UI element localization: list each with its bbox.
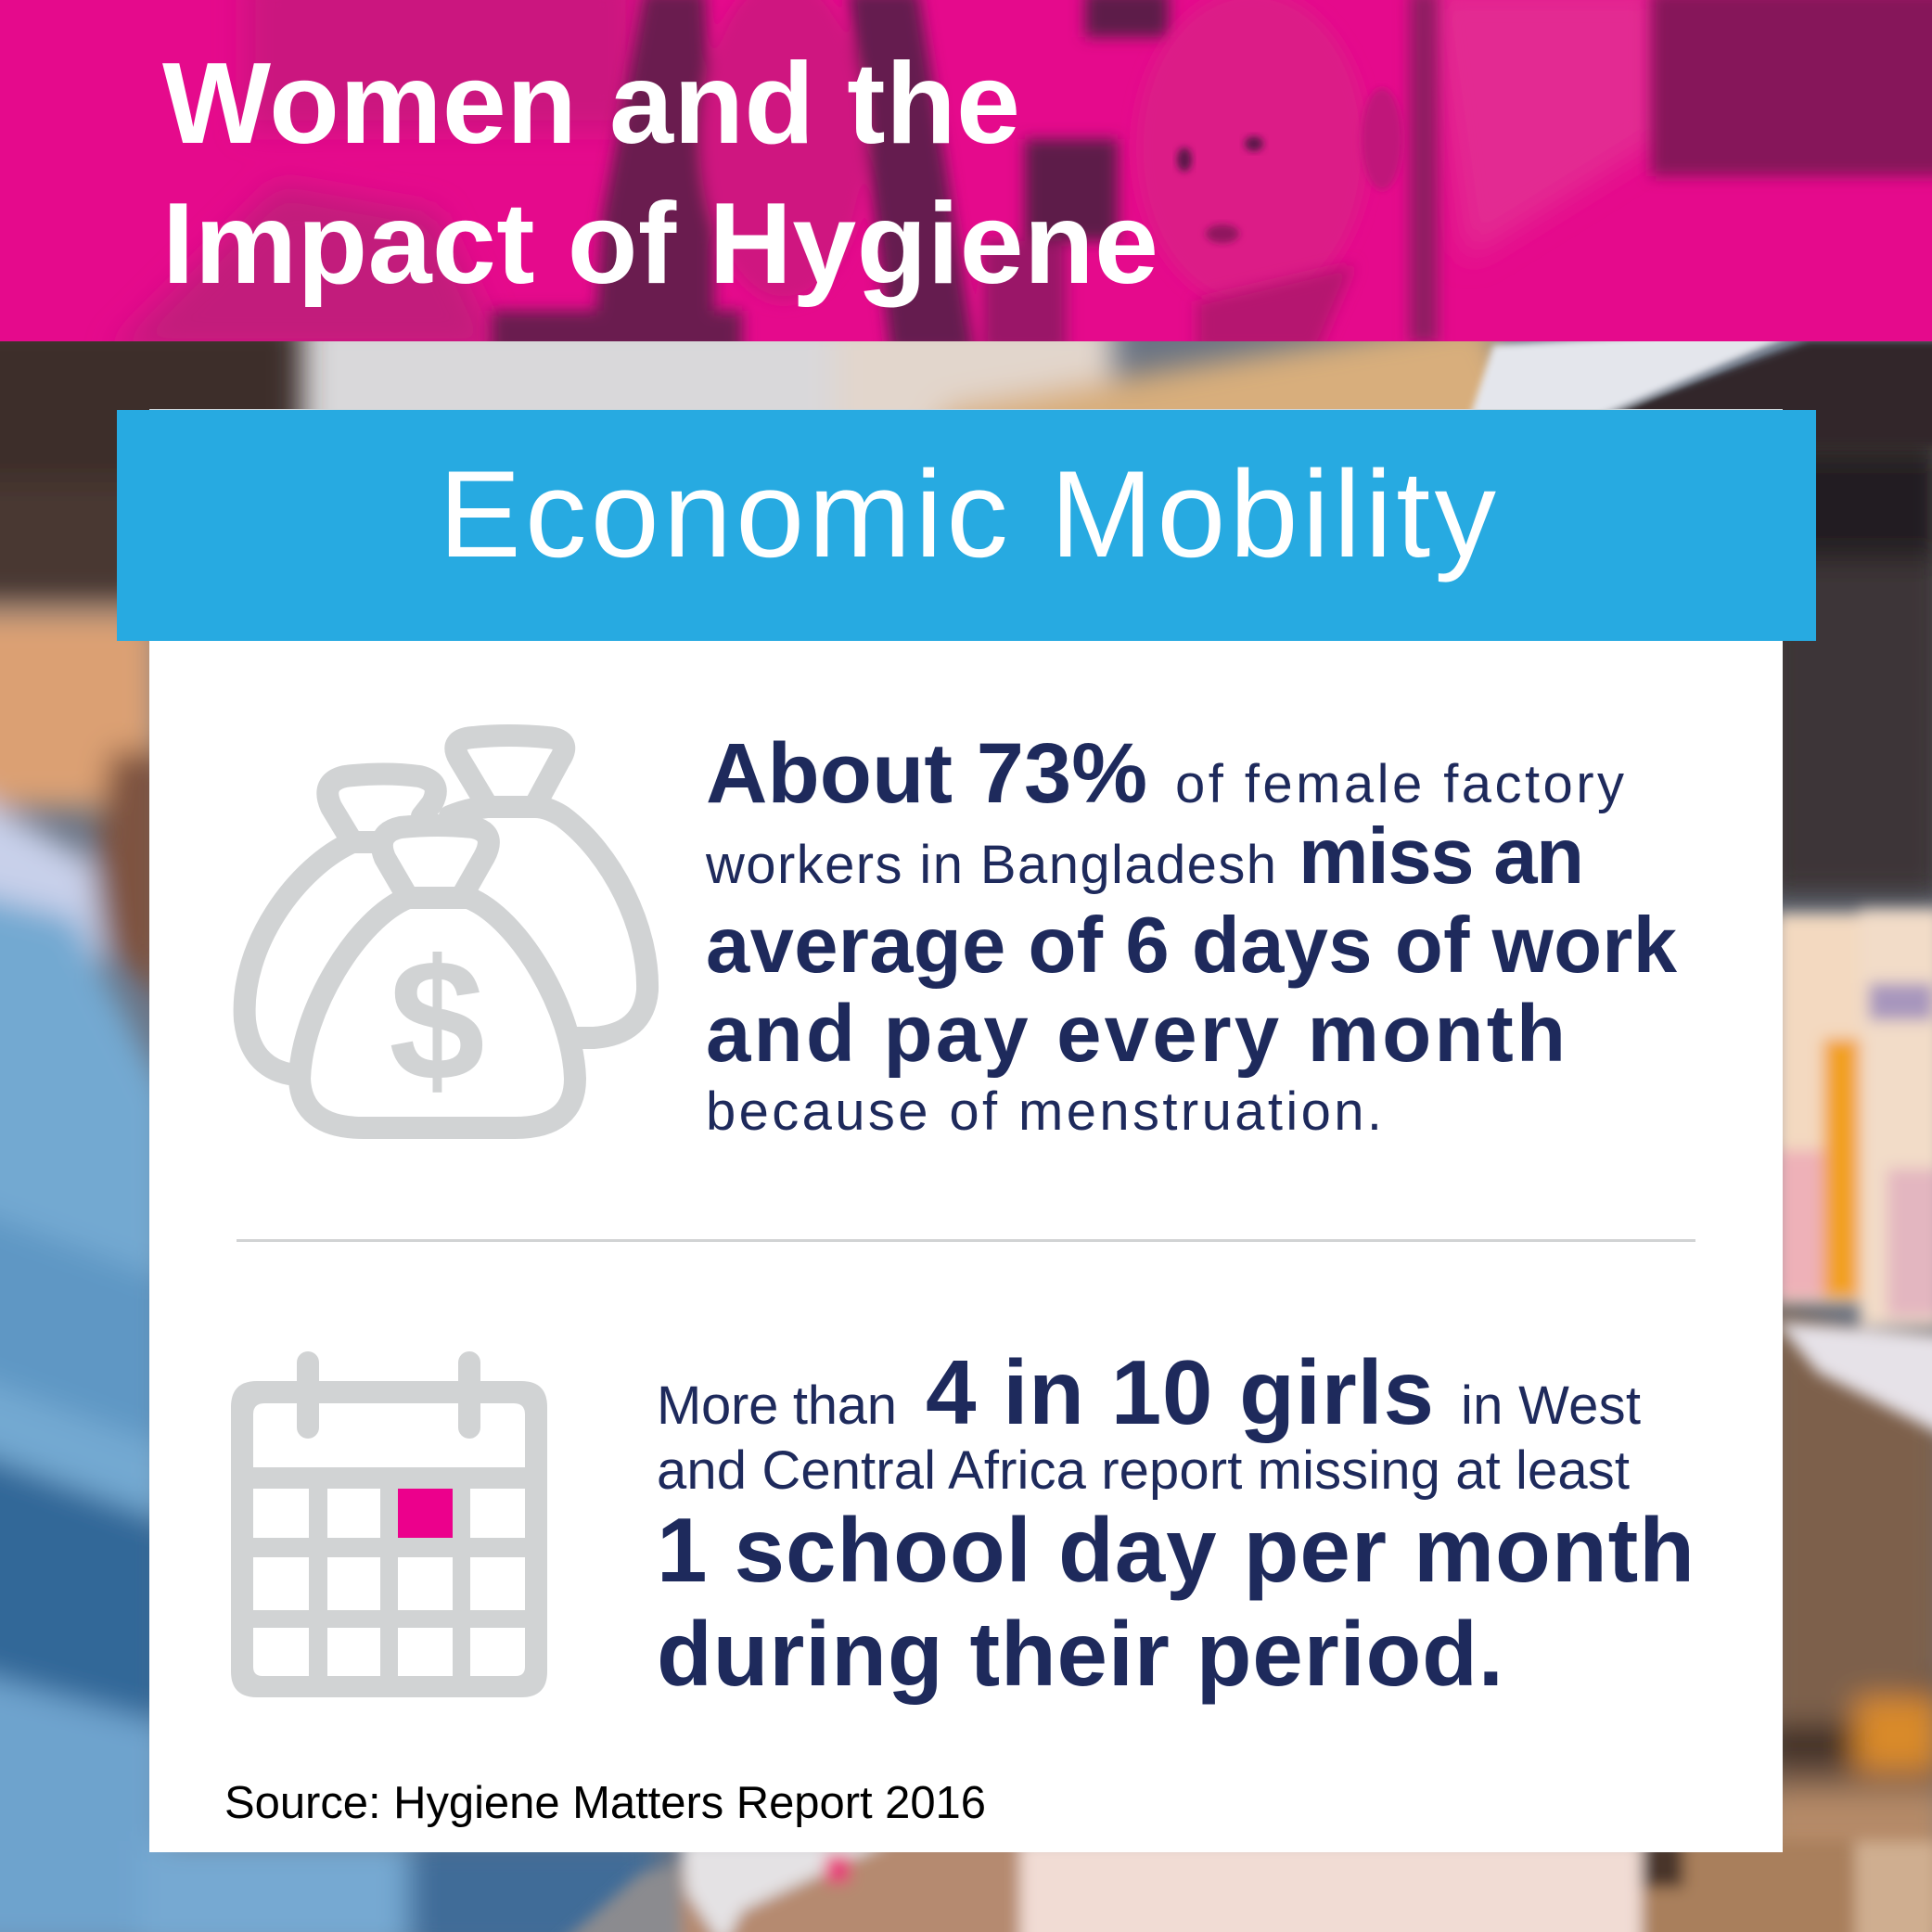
heading: Economic Mobility: Economic Mobility <box>439 446 1497 583</box>
front bag <box>382 825 489 898</box>
first statistic text block: of female factory <box>1175 754 1624 814</box>
left person: hair, skin and shirt <box>0 315 301 501</box>
pink duotone banner photo <box>0 0 1932 357</box>
second statistic text block: 4 in 10 girls <box>926 1341 1434 1443</box>
dark block, right <box>1651 0 1932 176</box>
icon: calendar <box>231 1351 547 1697</box>
blue heading band <box>117 410 1816 641</box>
first statistic text block: because of menstruation. <box>706 1081 1382 1142</box>
back right bag <box>450 736 647 1038</box>
source note: Source: Hygiene Matters Report 2016 <box>224 1778 986 1828</box>
baby head <box>1136 0 1402 352</box>
first statistic text block: and pay every month <box>706 989 1566 1079</box>
dollar sign: $ <box>389 925 485 1117</box>
woman's hair and face <box>594 0 714 352</box>
first statistic text block: About 73% <box>706 726 1147 821</box>
second statistic text block <box>657 1341 1695 1705</box>
second statistic text block: 1 school day per month <box>657 1499 1695 1601</box>
highlighted day <box>398 1489 453 1538</box>
second statistic text block: More than <box>657 1375 897 1436</box>
back left bag <box>245 774 436 1074</box>
second statistic text block: and Central Africa report missing at least <box>657 1440 1630 1501</box>
white content panel <box>149 410 1783 1852</box>
second statistic text block: in West <box>1461 1375 1641 1436</box>
first statistic text block: miss an <box>1299 812 1584 901</box>
first statistic text block: average of 6 days of work <box>706 902 1678 990</box>
title: Impact of Hygiene <box>162 180 1158 308</box>
first statistic text block <box>705 726 1678 1142</box>
title: Women and the <box>162 40 1020 168</box>
first statistic text block: workers in Bangladesh <box>705 835 1276 895</box>
diaper packages on shelf <box>1776 909 1932 1438</box>
title <box>162 40 1158 308</box>
second statistic text block: during their period. <box>657 1603 1503 1705</box>
bottom strip objects <box>139 1841 427 1932</box>
icon: money bags <box>245 736 647 1128</box>
